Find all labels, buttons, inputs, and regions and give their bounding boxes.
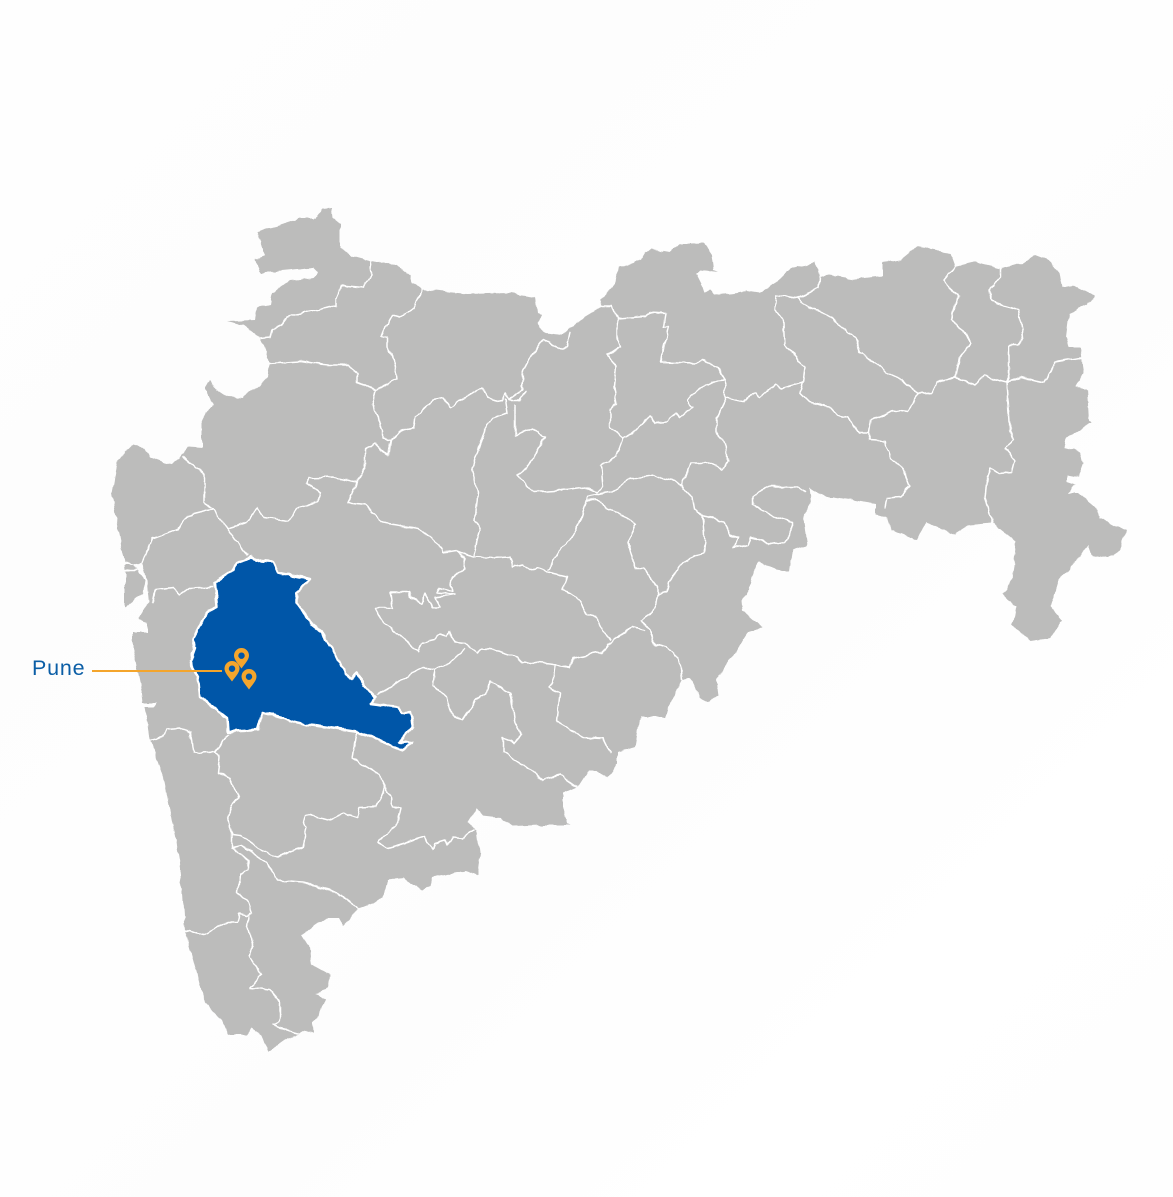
map: Maharashtra districts (112, 208, 1126, 1052)
leader line (92, 670, 222, 672)
Mumbai island (124, 565, 145, 608)
Pune district highlighted (190, 557, 413, 750)
pin 3 (242, 669, 256, 690)
label text: Pune (32, 656, 85, 680)
pin 1 (234, 648, 249, 668)
district boundaries (125, 262, 1081, 1033)
state outline (112, 208, 1126, 1052)
pin 2 (224, 661, 240, 682)
icon: location pins (224, 648, 256, 690)
